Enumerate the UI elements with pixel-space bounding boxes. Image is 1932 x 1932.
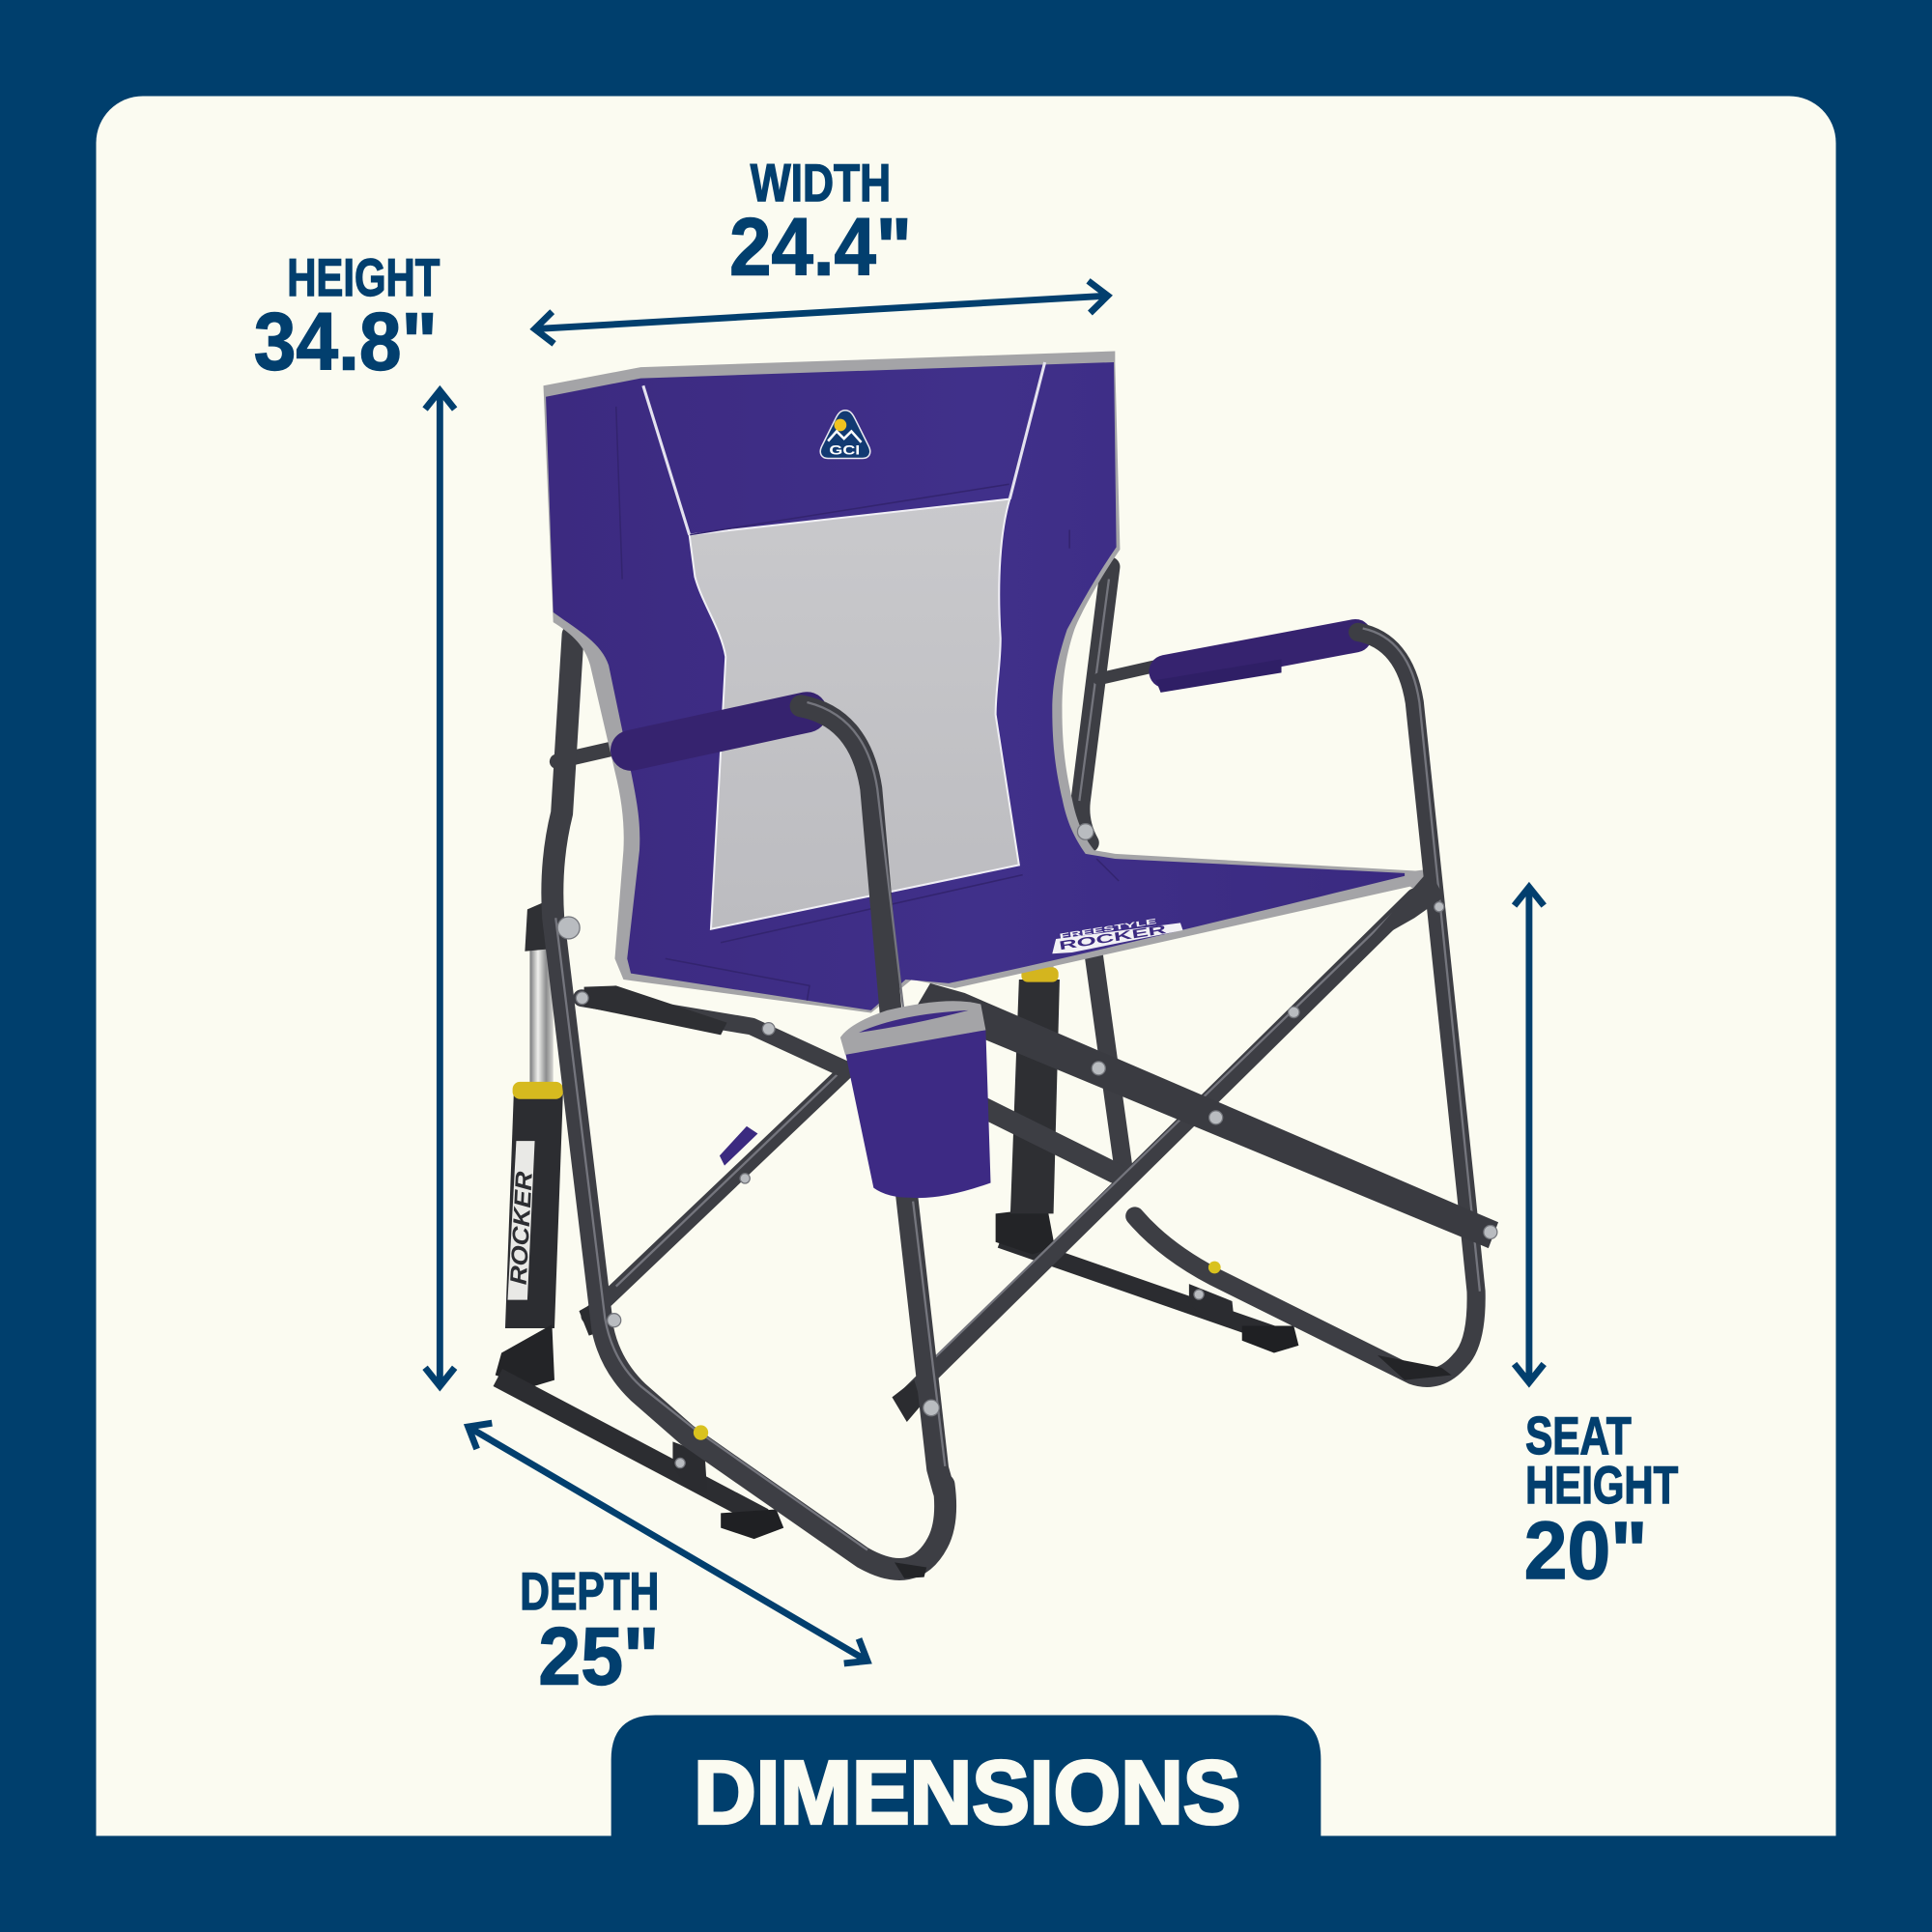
depth label bbox=[520, 1561, 659, 1702]
width arrow bbox=[535, 281, 1108, 344]
shock label bbox=[506, 1141, 538, 1300]
square bottom of panel bbox=[96, 1775, 1836, 1836]
shock body bbox=[505, 1092, 563, 1328]
seat height label: HEIGHT bbox=[1525, 1455, 1678, 1515]
mesh panel bbox=[690, 499, 1019, 929]
seat height label: 20" bbox=[1524, 1505, 1647, 1596]
seat label: ROCKER bbox=[1058, 922, 1167, 952]
seat height label bbox=[1524, 1406, 1678, 1596]
seat label: FREESTYLE bbox=[1059, 917, 1157, 941]
width label: WIDTH bbox=[751, 153, 891, 213]
bottom band bbox=[0, 1836, 1932, 1932]
width label bbox=[729, 153, 912, 292]
seat label bbox=[1052, 917, 1182, 953]
cup rim bbox=[840, 1001, 985, 1055]
cup body bbox=[845, 1030, 991, 1198]
width label: 24.4" bbox=[729, 201, 912, 292]
left rocker shock bbox=[496, 902, 563, 1387]
right arm rail bbox=[1135, 629, 1480, 1380]
left side rail bbox=[553, 635, 946, 1569]
left rocker base bbox=[497, 1378, 783, 1539]
height arrow bbox=[425, 390, 455, 1386]
title: DIMENSIONS bbox=[694, 1743, 1240, 1843]
back right post and leg bbox=[1079, 567, 1123, 1171]
right rocker base and shock bbox=[996, 963, 1298, 1353]
purple fabric bbox=[546, 362, 1414, 1010]
fabric back and seat bbox=[543, 352, 1433, 1012]
armrest stubs bbox=[557, 667, 1153, 761]
rivets bbox=[557, 824, 1497, 1468]
fabric trim bbox=[543, 352, 1430, 1012]
depth label: DEPTH bbox=[520, 1561, 659, 1621]
shock label: ROCKER bbox=[506, 1171, 538, 1286]
height label bbox=[254, 247, 440, 387]
cup opening bbox=[859, 1010, 969, 1033]
right armrest pad bbox=[1155, 636, 1355, 693]
rear cross brace bbox=[579, 1067, 1115, 1336]
GCI logo bbox=[820, 411, 870, 458]
chair illustration bbox=[496, 352, 1498, 1578]
seat height label: SEAT bbox=[1525, 1406, 1632, 1465]
piping bbox=[643, 362, 1045, 535]
seat height arrow bbox=[1515, 887, 1544, 1382]
title tab bbox=[611, 1716, 1321, 1843]
depth label: 25" bbox=[538, 1611, 659, 1702]
left armrest tube and front leg bbox=[801, 702, 945, 1578]
height label: 34.8" bbox=[254, 297, 438, 387]
cup holder bbox=[840, 1001, 991, 1198]
seat corner wrap bbox=[1405, 870, 1433, 899]
depth arrow bbox=[469, 1423, 867, 1663]
GCI logo: GCI bbox=[829, 443, 860, 458]
shock rod bbox=[529, 949, 554, 1087]
front support bar bbox=[582, 983, 1498, 1248]
height label: HEIGHT bbox=[287, 247, 440, 307]
left armrest pad bbox=[631, 712, 807, 751]
seams bbox=[616, 407, 1119, 1001]
main cross brace bbox=[892, 870, 1444, 1422]
